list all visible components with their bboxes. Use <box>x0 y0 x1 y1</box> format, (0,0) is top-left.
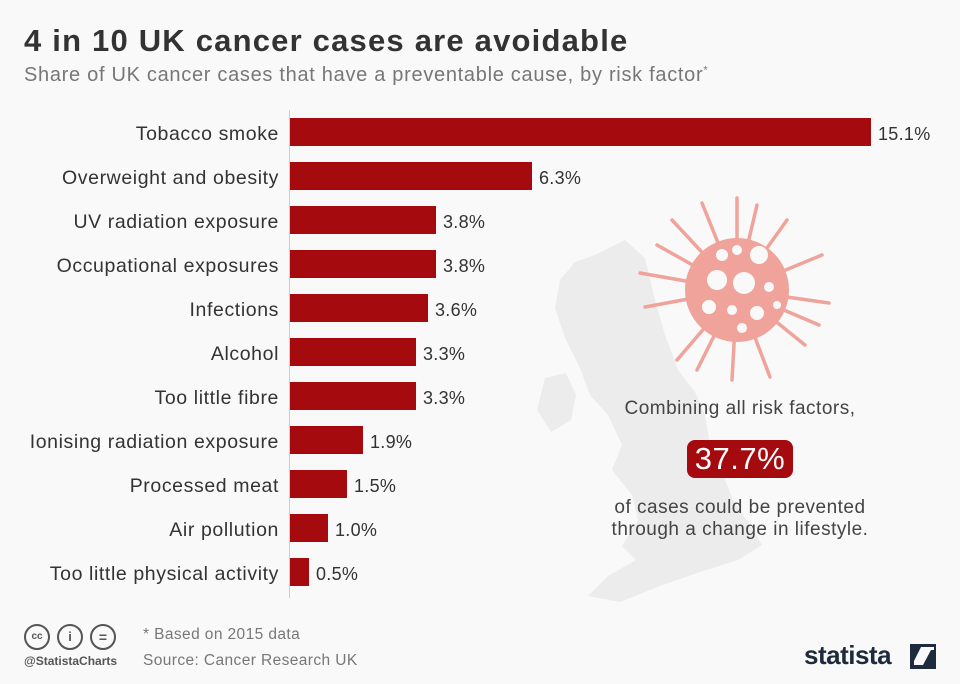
callout: combined share: Combining all risk factors, <box>624 398 856 419</box>
bar chart: 15.1% <box>878 124 931 144</box>
bar chart: 3.8% <box>443 256 485 276</box>
bar chart: Overweight and obesity <box>62 167 279 189</box>
bar chart: Tobacco smoke <box>136 123 279 145</box>
bar chart: Ionising radiation exposure <box>30 431 279 453</box>
bar chart: Occupational exposures <box>57 255 279 277</box>
icon: cc license: cc <box>31 631 43 642</box>
statista logo <box>804 640 936 670</box>
bar chart: 3.3% <box>423 388 465 408</box>
footnote: * Based on 2015 data <box>143 626 300 643</box>
statista logo: statista <box>804 640 891 670</box>
bar chart: UV radiation exposure <box>73 211 279 233</box>
subtitle: Share of UK cancer cases that have a preventable cause, by risk factor* <box>24 64 708 86</box>
bar chart: 6.3% <box>539 168 581 188</box>
handle: @StatistaCharts <box>24 654 117 668</box>
title: 4 in 10 UK cancer cases are avoidable <box>24 23 628 58</box>
bar chart: Too little physical activity <box>50 563 279 585</box>
bar chart: 1.9% <box>370 432 412 452</box>
callout: combined share: through a change in lifestyle. <box>612 519 868 540</box>
bar chart: 1.5% <box>354 476 396 496</box>
bar chart: 3.3% <box>423 344 465 364</box>
source: Source: Cancer Research UK <box>143 652 358 669</box>
bar chart: 3.8% <box>443 212 485 232</box>
icon: cc license <box>24 624 116 650</box>
icon: cancer cell <box>638 196 831 382</box>
bar chart: 3.6% <box>435 300 477 320</box>
bar chart: 1.0% <box>335 520 377 540</box>
callout: combined share <box>612 398 868 540</box>
bar chart: Air pollution <box>169 519 279 541</box>
bar chart: Alcohol <box>211 343 279 365</box>
icon: cc license: = <box>99 629 107 645</box>
bar chart <box>30 110 931 598</box>
bar chart: 0.5% <box>316 564 358 584</box>
highlight badge: 37.7% <box>695 441 785 476</box>
callout: combined share: of cases could be prevented <box>614 497 866 518</box>
bar chart: Processed meat <box>130 475 279 497</box>
bar chart: Too little fibre <box>154 387 279 409</box>
icon: cc license: i <box>68 629 72 644</box>
bar chart: Infections <box>190 299 279 321</box>
